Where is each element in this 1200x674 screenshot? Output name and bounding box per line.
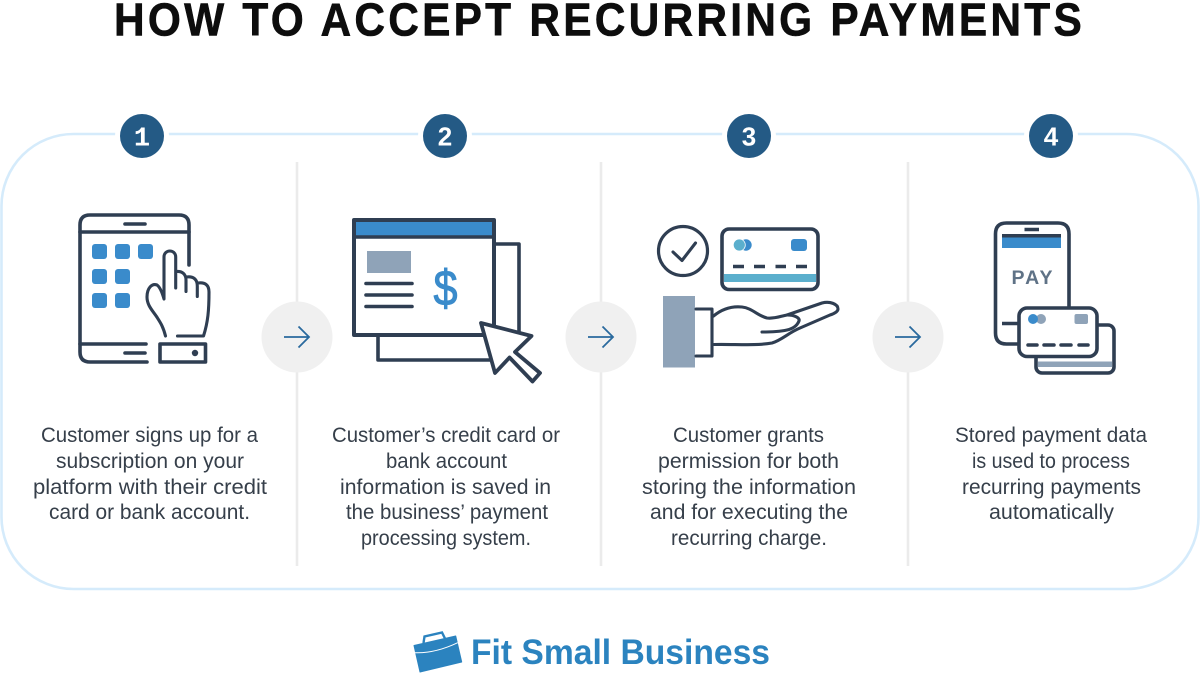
step 3 text: storing the information xyxy=(642,476,856,499)
step 2 text: processing system. xyxy=(361,527,531,550)
step 2 text: information is saved in xyxy=(340,476,551,499)
step 4 text xyxy=(955,424,1147,524)
arrow 2 xyxy=(566,302,636,372)
step 4 badge xyxy=(1024,109,1078,163)
step 1 badge xyxy=(115,109,169,163)
step 2 text: the business’ payment xyxy=(346,501,548,524)
step 2 badge: 2 xyxy=(438,122,452,152)
step 1 text: card or bank account. xyxy=(49,501,250,524)
step 1 text: Customer signs up for a xyxy=(41,424,258,447)
step 1 text: subscription on your xyxy=(56,450,244,473)
step 1 text xyxy=(33,424,267,524)
step 4 text: automatically xyxy=(989,501,1115,524)
step 4 text: Stored payment data xyxy=(955,424,1147,447)
step 3 badge: 3 xyxy=(742,122,756,152)
step 4 badge: 4 xyxy=(1044,122,1059,152)
arrow 3 xyxy=(872,302,944,372)
panel outline xyxy=(2,134,1198,589)
step 3 text: permission for both xyxy=(658,450,839,473)
icon: hand holding credit card with check xyxy=(658,226,838,368)
icon: phone with pay and cards xyxy=(996,223,1114,373)
step 2 text xyxy=(332,424,560,550)
step 4 text: is used to process xyxy=(972,450,1130,473)
step 3 text: and for executing the xyxy=(650,501,848,524)
icon: phone with pay and cards: PAY xyxy=(1012,267,1052,289)
step 2 badge xyxy=(418,109,472,163)
step 4 text: recurring payments xyxy=(962,476,1141,499)
step 3 text: recurring charge. xyxy=(671,527,827,550)
icon: browser window with dollar and cursor: $ xyxy=(434,260,458,316)
arrow 1 xyxy=(262,302,332,372)
step 1 badge: 1 xyxy=(134,124,150,154)
icon: tablet with tapping hand xyxy=(80,215,209,362)
logo: Fit Small Business: Fit Small Business xyxy=(471,633,770,672)
step 1 text: platform with their credit xyxy=(33,476,267,499)
step 3 text xyxy=(642,424,856,550)
step 3 badge xyxy=(722,109,776,163)
step 2 text: Customer’s credit card or xyxy=(332,424,560,447)
step 2 text: bank account xyxy=(386,450,507,473)
icon: browser window with dollar and cursor xyxy=(354,220,540,382)
step 3 text: Customer grants xyxy=(673,424,824,447)
